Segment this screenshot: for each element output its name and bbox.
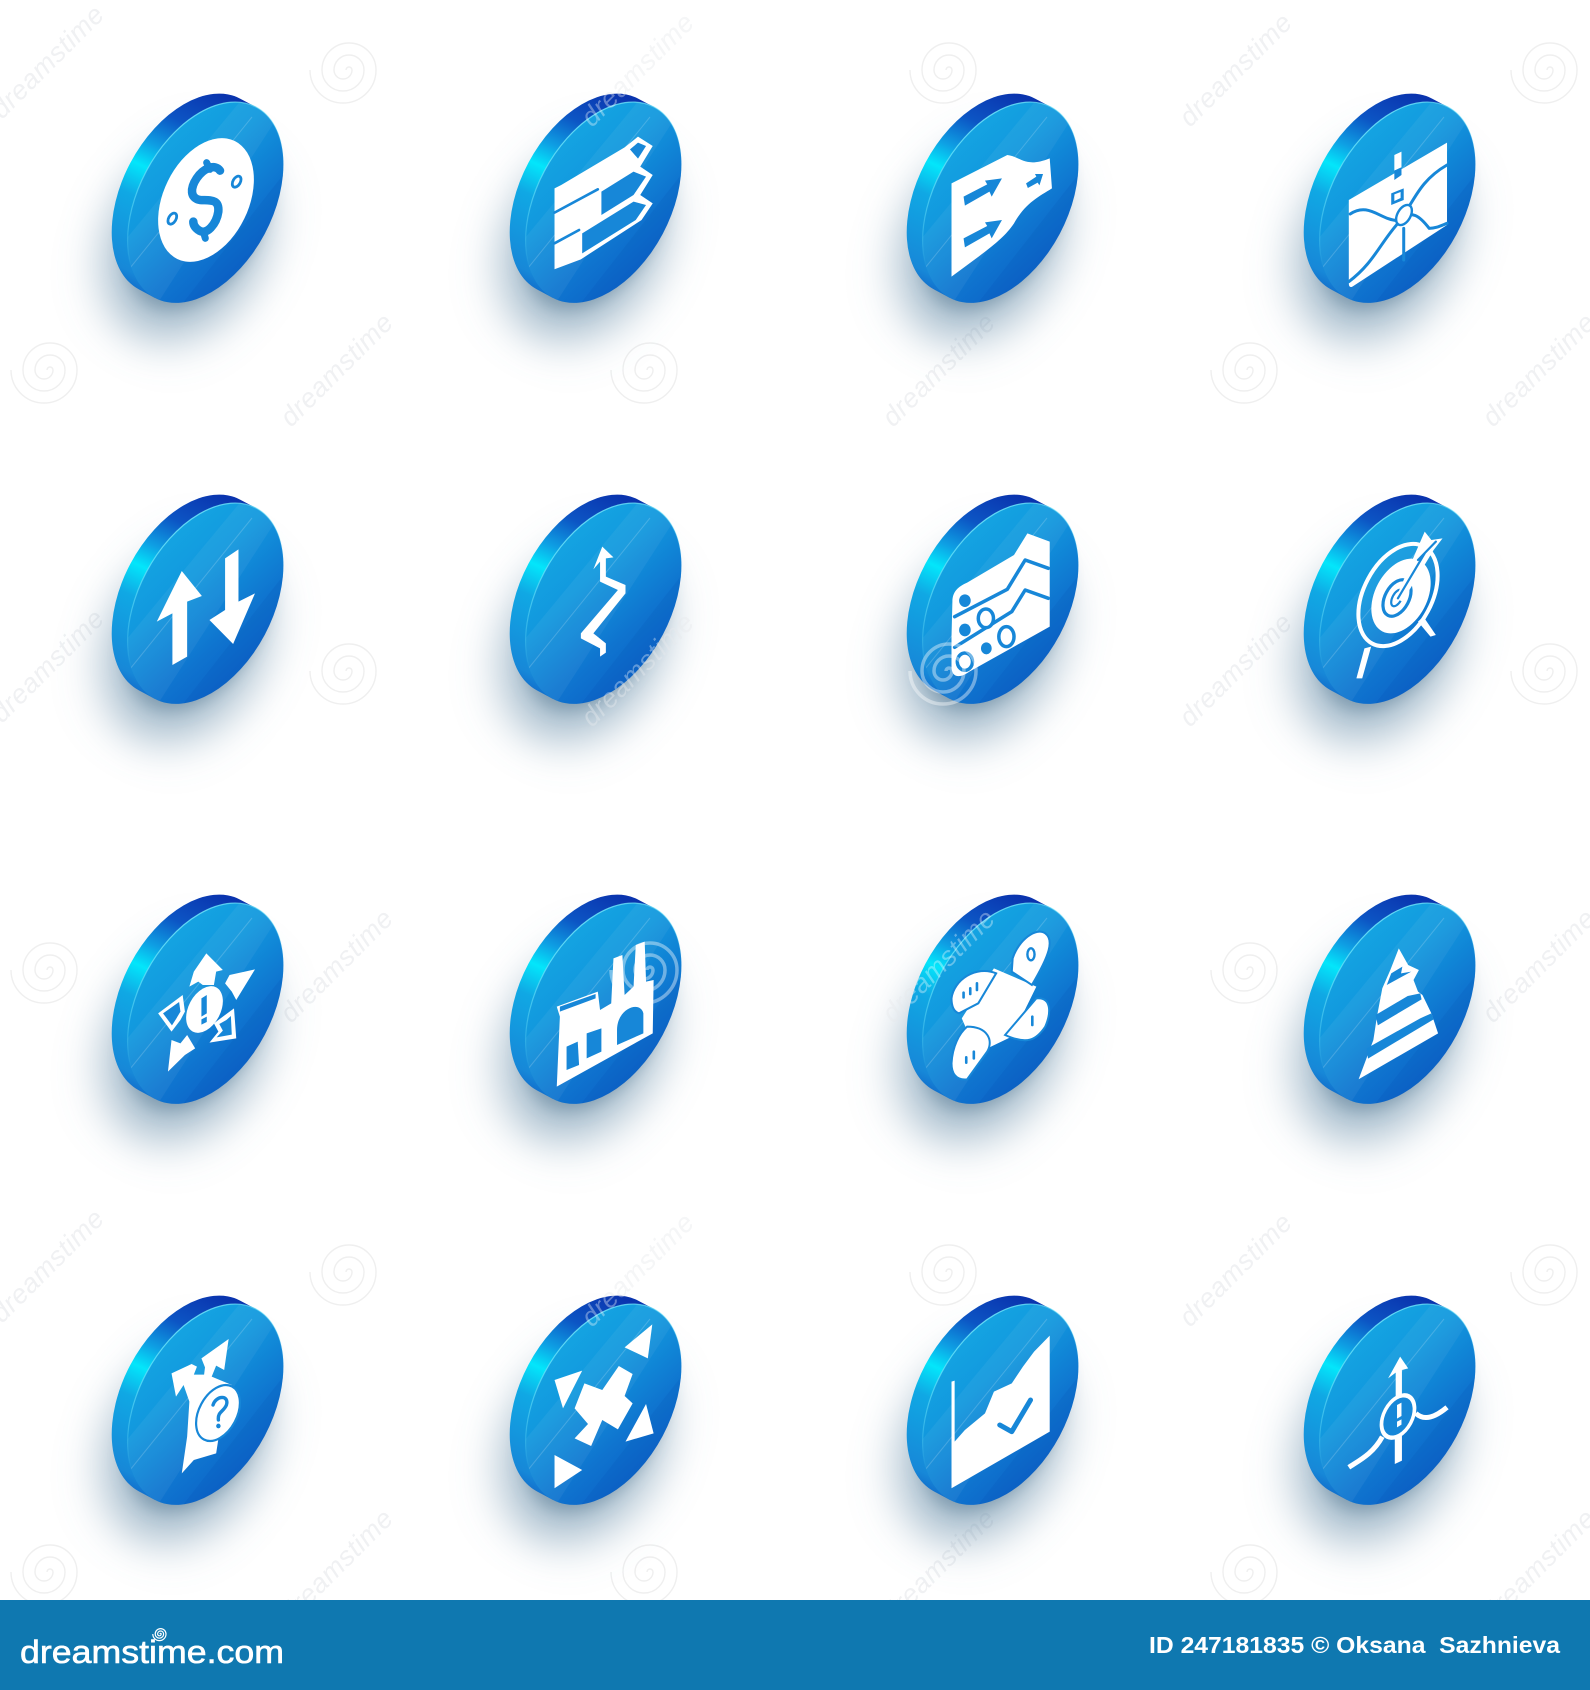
watermark overlays on coins: dreamstime — [575, 1207, 700, 1332]
icon coin: discussion bubbles — [865, 877, 1110, 1171]
icon coin: archery target — [1262, 477, 1507, 771]
watermark layer: dreamstime — [274, 903, 399, 1028]
watermark layer: dreamstime — [1173, 7, 1298, 132]
footer logo: dreamstime.com — [20, 1634, 284, 1670]
icon coin: chart with alert — [1262, 76, 1507, 370]
watermark layer: dreamstime — [274, 307, 399, 432]
watermark overlays on coins — [575, 7, 1001, 1332]
watermark layer: dreamstime — [876, 903, 1001, 1028]
watermark overlays on coins: dreamstime — [876, 903, 1001, 1028]
icon coin: three step chart — [865, 477, 1110, 771]
icon coin: crossroad with question — [70, 1278, 315, 1572]
watermark layer: dreamstime — [1173, 607, 1298, 732]
icon coin: dollar sign — [70, 76, 315, 370]
icon coin: wavy sheet with arrows — [865, 76, 1110, 370]
footer credit: ID 247181835 © Oksana Sazhnieva — [1149, 1632, 1560, 1658]
watermark layer: dreamstime — [1173, 1207, 1298, 1332]
watermark layer: dreamstime — [575, 607, 700, 732]
footer logo spiral — [153, 1629, 166, 1641]
watermark layer: dreamstime — [274, 1503, 399, 1628]
icon coin: stepped pyramid — [1262, 877, 1507, 1171]
watermark layer: dreamstime — [876, 307, 1001, 432]
watermark layer: dreamstime — [876, 1503, 1001, 1628]
icon coin: factory — [468, 877, 713, 1171]
watermark layer: dreamstime — [575, 1207, 700, 1332]
footer bar — [0, 1600, 1590, 1690]
icon coin: arrow through alert — [1262, 1278, 1507, 1572]
icon coin: cross with four triangles — [468, 1278, 713, 1572]
icon coin: arrows around alert — [70, 877, 315, 1171]
icon coin: zigzag arrow — [468, 477, 713, 771]
icon coin: up and down arrows — [70, 477, 315, 771]
watermark overlays on coins: dreamstime — [575, 7, 700, 132]
icon coin: area chart with check — [865, 1278, 1110, 1572]
watermark layer: dreamstime — [575, 7, 700, 132]
icon coin: stacked arrow bars — [468, 76, 713, 370]
watermark overlays on coins: dreamstime — [575, 607, 700, 732]
